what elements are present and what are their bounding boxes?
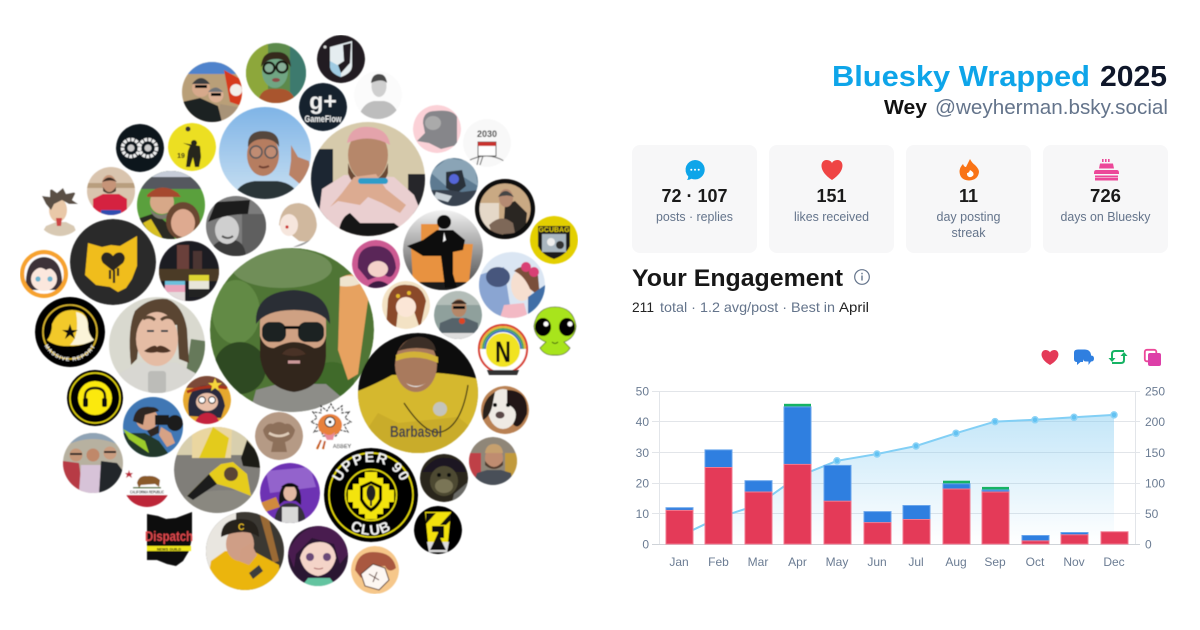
avatar: spiky orange cartoon [309,404,353,450]
avatar: California flag [124,470,168,508]
avatar: spiky hair sketch [42,188,78,236]
avatar: three men group photo [63,433,123,493]
stat value: 151 [816,186,846,206]
avatar: rainbow N badge [479,325,527,375]
bar: Aug [943,481,970,544]
avatar: yellow soccer club badge: GCUBAG [538,227,570,234]
avatar: California flag: CALIFORNIA REPUBLIC [130,490,164,494]
avatar: purple anime girl [288,526,348,586]
avatar: Minnesota crest [317,35,365,83]
avatar: GameFlow logo: g+ [309,88,337,114]
avatar: man in tan beanie [469,437,517,485]
avatar: black and gold crest [414,506,462,554]
avatar: couple at stadium [137,171,205,240]
line markers [834,412,1117,464]
avatar: large selfie with sunglasses [210,248,374,412]
avatar: yellow kit player on ground [174,427,260,513]
avatar: Upper 90 Club logo: CLUB [350,520,391,536]
left axis labels [636,384,649,552]
stat value: 11 [959,186,978,206]
month labels: Mar [748,555,768,569]
avatar: spaniel dog [481,386,529,434]
avatar: Dispatch news guild: Dispatch [145,529,193,544]
engagement summary: 211 [632,299,654,315]
avatar: carved frog coin [255,412,303,460]
bar: Sep [982,487,1009,544]
month labels: Jun [867,555,887,569]
month labels: May [826,555,848,569]
avatar: rainbow N badge: N [495,336,511,369]
legend icons [1042,350,1161,366]
engagement summary: April [839,299,869,315]
bar: Jan [666,508,693,544]
bar: Dec [1101,532,1128,544]
avatar: city at night with flags [159,241,219,301]
avatar: Massive Report logo: MASSIVE REPORT [44,343,96,362]
avatar: pink and gray creature [413,105,461,153]
avatar: man in yellow Crew jersey: Barbasol [390,424,442,441]
avatar: grayscale woman in hat [206,196,266,256]
avatar: Dispatch news guild [145,512,193,566]
combo chart [636,384,1165,569]
avatar: Massive Report logo [34,296,106,368]
avatar: couple selfie [182,62,242,122]
month labels [669,555,1125,569]
right axis labels: 50 [1145,507,1159,521]
right axis labels: 0 [1145,538,1152,552]
stat card: likes [769,145,894,253]
left axis labels: 10 [636,507,649,521]
month labels: Feb [708,555,729,569]
avatar: photographer illustration [123,397,183,457]
left axis labels: 50 [636,384,649,398]
bar: Oct [1022,536,1049,544]
bar: Nov [1061,532,1088,544]
right axis labels: 150 [1145,446,1165,460]
stat card: days on Bluesky [1043,145,1168,253]
month labels: Jan [669,555,689,569]
title: year: 2025 [1100,61,1167,93]
stat card: streak [906,145,1031,253]
avatar cluster [20,35,578,594]
month labels: Dec [1103,555,1125,569]
month labels: Sep [984,555,1006,569]
avatar: man in yellow hoodie [206,512,284,590]
heading: Your Engagement: Your Engagement [632,265,843,292]
avatar: yellow player poster [168,123,216,171]
icon: flame [960,159,979,180]
avatar: Dispatch news guild: NEWS GUILD [157,547,181,551]
avatar: lime green alien [534,307,576,355]
cumulative area [679,415,1114,544]
month labels: Aug [945,555,967,569]
stat value: 726 [1090,186,1121,206]
avatar: man in red shirt [87,167,135,215]
stat label second line: streak [952,226,986,240]
avatar: chimpanzee in hat [420,454,468,502]
legend: replies chat [1074,350,1094,365]
legend: likes heart [1042,350,1058,365]
avatar: yellow headphones logo [67,370,123,426]
avatar: Ohio patch with heart [70,219,156,305]
month labels: Apr [788,555,807,569]
avatar: 2030 calendar sketch [469,130,504,166]
avatar: sci-fi armored figure [430,158,478,206]
right axis labels: 100 [1145,476,1165,490]
right axis labels [1145,384,1165,552]
bar: Jul [903,506,930,544]
avatar: anime girl with orange ring [20,250,68,298]
avatar: man with pink headband [311,122,425,236]
avatar: Upper 90 Club logo [323,447,419,543]
avatar: grayscale man sketch [360,73,397,120]
avatar: blond sketch character [278,202,318,248]
title: Bluesky Wrapped: Bluesky Wrapped [832,61,1090,93]
left axis labels: 40 [636,415,649,429]
avatar: GameFlow logo: GameFlow [304,114,342,124]
stat value: 72 · 107 [662,186,728,206]
month labels: Oct [1026,555,1045,569]
stacked bars [666,404,1128,544]
title block [832,61,1168,119]
stat label: likes received [794,210,869,224]
avatar: brown hair anime [382,281,430,329]
bar: May [824,465,851,544]
bar: Feb [705,450,732,544]
avatar: green portrait painting [246,43,306,103]
left axis labels: 30 [636,446,649,460]
stat label: day posting [936,210,1001,224]
avatar: man in yellow hoodie: C [238,522,245,532]
avatar: man with mustache [109,297,205,393]
avatar: flower crown anime couple [479,252,545,318]
chart gridlines and axes [652,391,1140,544]
avatar: dark infinity logo [116,124,164,172]
bar: Jun [864,512,891,544]
display name: Wey [884,97,928,119]
stat label: posts · replies [656,210,733,224]
legend: quotes squares [1145,350,1161,366]
avatar: orange hair sketch [351,546,399,594]
avatar: 2030 calendar sketch: 2030 [477,129,497,139]
avatar: yellow player poster: 19 [177,153,185,160]
right axis labels: 200 [1145,415,1165,429]
month labels: Jul [908,555,924,569]
avatar: reporter with microphone [434,291,482,339]
avatar: GameFlow logo [299,83,347,131]
legend: reposts arrows [1108,351,1128,363]
avatar: purple hair anime [352,240,400,288]
avatar: cartoon girl with star hat [183,376,231,424]
avatar: Upper 90 Club logo: UPPER 90 [331,450,410,482]
left axis labels: 20 [636,476,649,490]
cumulative line [679,415,1114,537]
handle: @weyherman.bsky.social [935,97,1168,119]
avatar: spiky orange cartoon: ABBEY [333,444,352,450]
left axis labels: 0 [642,538,649,552]
engagement summary: total · 1.2 avg/post · Best in [660,299,835,315]
avatar: man in yellow Crew jersey [358,333,478,453]
stat card: posts and replies [632,145,757,253]
avatar: man pointing under blue sky [219,107,311,199]
icon: cake [1094,159,1119,180]
avatar: yellow soccer club badge [530,216,578,264]
avatar: purple background woman [260,463,320,523]
icon: info [855,270,869,284]
bar: Mar [745,481,772,544]
stat label: days on Bluesky [1060,210,1151,224]
bar: Apr [784,404,811,544]
right axis labels: 250 [1145,384,1165,398]
icon: chat bubble [686,160,705,180]
icon: heart [822,160,842,180]
month labels: Nov [1063,555,1085,569]
avatar: woman with cat in black ring [475,179,535,239]
avatar: silhouette on orange chair [403,210,483,290]
